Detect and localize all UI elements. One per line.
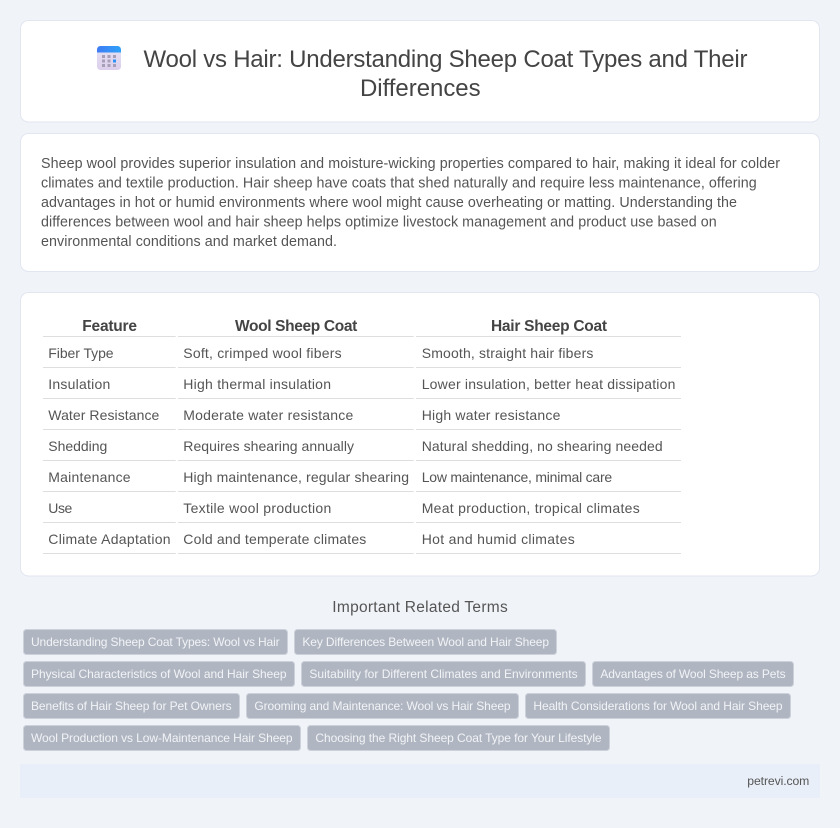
table row: insulation: High thermal insulation xyxy=(183,376,331,392)
table row: fiber type xyxy=(48,345,593,361)
table row: climate adaptation: Hot and humid climates xyxy=(422,531,575,547)
table row: use xyxy=(48,500,640,516)
heading: important related terms: Important Related Terms xyxy=(332,599,508,616)
table row: shedding: Shedding xyxy=(48,438,107,454)
tag xyxy=(526,694,790,718)
table row: water resistance: Moderate water resistance xyxy=(183,407,354,423)
tag: Advantages of Wool Sheep as Pets xyxy=(600,667,786,681)
table row: shedding xyxy=(48,438,663,454)
table row: maintenance: High maintenance, regular shearing xyxy=(183,469,409,485)
text block: introduction paragraph: climates and textile production. Hair sheep have coats that shed naturally and require less maintenance, offering xyxy=(41,176,757,192)
table row: shedding: Requires shearing annually xyxy=(183,438,354,454)
table row: water resistance: High water resistance xyxy=(422,407,561,423)
tag xyxy=(24,630,288,654)
table header: Wool Sheep Coat xyxy=(235,318,357,335)
tag xyxy=(302,662,586,686)
title: Wool vs Hair: Understanding Sheep Coat Types and Their xyxy=(144,46,748,73)
text block: introduction paragraph xyxy=(41,156,780,250)
table row: maintenance: Low maintenance, minimal care xyxy=(422,469,612,485)
tag xyxy=(308,726,610,750)
tag: Benefits of Hair Sheep for Pet Owners xyxy=(31,699,232,713)
table row: use: Use xyxy=(48,500,73,516)
footer source text: petrevi.com xyxy=(747,774,809,788)
table row: insulation: Lower insulation, better heat dissipation xyxy=(422,376,675,392)
tag: Understanding Sheep Coat Types: Wool vs Hair xyxy=(31,635,280,649)
panel: comparison table xyxy=(20,292,820,576)
tag: Choosing the Right Sheep Coat Type for Your Lifestyle xyxy=(315,731,602,745)
table row: use: Textile wool production xyxy=(183,500,331,516)
text block: introduction paragraph: advantages in hot or humid environments where wool might cause overheating or matting. Understanding the xyxy=(41,195,737,211)
tag: Suitability for Different Climates and Environments xyxy=(309,667,578,681)
title: Differences xyxy=(360,75,481,102)
text block: introduction paragraph: Sheep wool provides superior insulation and moisture-wicking properties compared to hair, making it ideal for colder xyxy=(41,156,780,172)
table header: Feature xyxy=(82,318,137,335)
tag: Wool Production vs Low-Maintenance Hair Sheep xyxy=(31,731,293,745)
panel: title card xyxy=(20,20,820,122)
footer xyxy=(20,764,820,798)
text block: introduction paragraph: environmental conditions and market demand. xyxy=(41,234,337,250)
table row: water resistance: Water Resistance xyxy=(48,407,160,423)
table row: climate adaptation: Cold and temperate climates xyxy=(183,531,366,547)
table row: climate adaptation xyxy=(48,531,575,547)
title xyxy=(144,46,748,102)
icon: calendar xyxy=(97,46,121,70)
tag: Grooming and Maintenance: Wool vs Hair Sheep xyxy=(254,699,511,713)
panel: introduction xyxy=(20,134,820,272)
panel: related term tags xyxy=(24,630,794,750)
tag xyxy=(24,662,294,686)
tag: Physical Characteristics of Wool and Hair Sheep xyxy=(31,667,287,681)
tag xyxy=(294,630,556,654)
tag xyxy=(246,694,518,718)
table row: use: Meat production, tropical climates xyxy=(422,500,640,516)
table row: maintenance xyxy=(48,469,612,485)
table row: insulation: Insulation xyxy=(48,376,110,392)
tag xyxy=(24,694,240,718)
tag xyxy=(592,662,794,686)
tag: Health Considerations for Wool and Hair Sheep xyxy=(533,699,783,713)
text block: introduction paragraph: differences between wool and hair sheep helps optimize livestock management and product use based on xyxy=(41,214,717,230)
tag: Key Differences Between Wool and Hair Sheep xyxy=(302,635,549,649)
table row: fiber type: Soft, crimped wool fibers xyxy=(183,345,342,361)
table header: Hair Sheep Coat xyxy=(491,318,607,335)
table row: shedding: Natural shedding, no shearing needed xyxy=(422,438,663,454)
table row: insulation xyxy=(48,376,675,392)
table header xyxy=(82,318,607,335)
table row: climate adaptation: Climate Adaptation xyxy=(48,531,171,547)
table row: fiber type: Fiber Type xyxy=(48,345,114,361)
table row: fiber type: Smooth, straight hair fibers xyxy=(422,345,593,361)
table row: water resistance xyxy=(48,407,561,423)
tag xyxy=(24,726,300,750)
table row: maintenance: Maintenance xyxy=(48,469,131,485)
